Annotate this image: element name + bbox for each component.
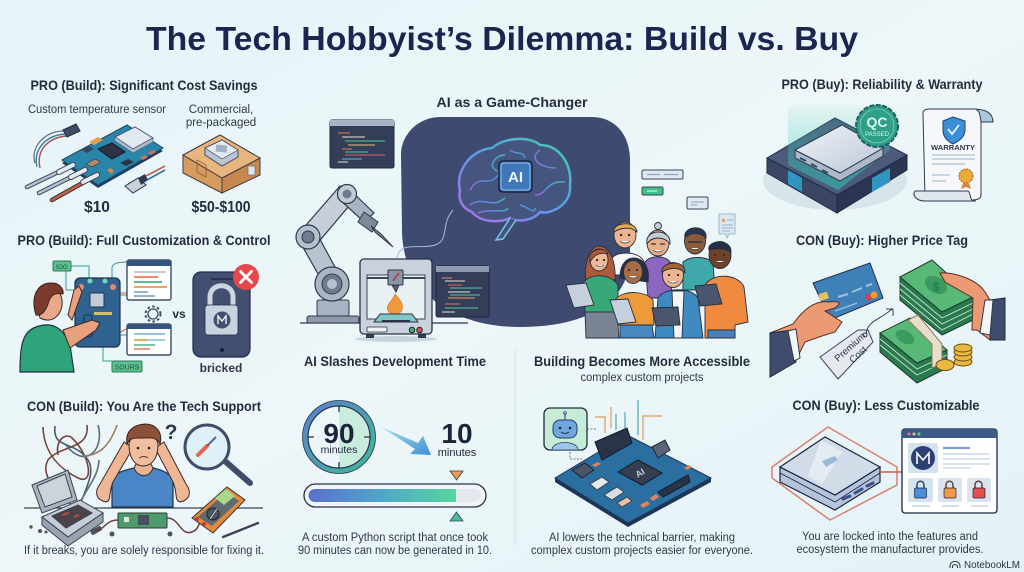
panel: CON build tech support	[24, 398, 264, 557]
icon: clock: 90	[323, 418, 355, 449]
icon: coins	[936, 344, 972, 370]
label: vs: vs	[172, 307, 186, 321]
outline: lock-in boundary	[772, 427, 897, 520]
tablet left	[566, 283, 594, 308]
window: code top	[127, 260, 171, 300]
value: 10 minutes: 10	[441, 418, 473, 449]
tablet far right	[695, 284, 722, 306]
price: $50-$100: $50-$100	[192, 199, 250, 216]
floating UI chips	[642, 170, 735, 238]
heading: CON (Buy): Higher Price Tag	[796, 232, 968, 248]
icon: locked device	[193, 264, 259, 357]
tag: IOG: IOG	[56, 264, 68, 271]
person: grey-haired woman	[645, 222, 672, 298]
icon: multimeter	[192, 487, 245, 533]
panel: CON buy less customizable	[772, 397, 997, 556]
icon: custom sensor board	[27, 124, 165, 200]
tag: premium cost: Premium	[833, 331, 868, 364]
person: front woman	[615, 258, 654, 338]
window: locked features	[902, 429, 997, 513]
icon: money stacks	[880, 260, 1005, 383]
icon: pen probe	[223, 523, 258, 537]
panel: AI as a game-changer	[296, 94, 748, 342]
heading: AI as a Game-Changer	[436, 94, 588, 110]
person: orange shirt man	[705, 242, 748, 338]
illustration: tangled wires	[43, 425, 117, 512]
icon: 3D printer	[355, 259, 437, 342]
person: front man	[655, 262, 703, 338]
label: bricked: bricked	[200, 361, 242, 375]
caption: ecosystem the manufacturer provides.	[796, 544, 984, 556]
panel: PRO build customization	[18, 232, 270, 375]
circuit traces	[595, 400, 662, 440]
caption: A custom Python script that once took	[302, 532, 488, 544]
panel: AI slashes development time	[298, 353, 492, 557]
icon: magnifier	[185, 425, 250, 483]
icon: green circuit board	[95, 513, 200, 533]
logo: NotebookLM: NotebookLM	[964, 560, 1020, 571]
debris	[29, 525, 172, 536]
icon: warranty scroll: WARRANTY	[931, 145, 975, 152]
tag: sours: SOURS	[115, 364, 140, 372]
heading: AI Slashes Development Time	[304, 353, 486, 369]
subheading: complex custom projects	[580, 372, 704, 384]
tag: premium cost	[820, 309, 893, 379]
connector	[880, 471, 902, 473]
icon: AI brain	[459, 139, 570, 240]
badge: QC passed: QC	[866, 114, 888, 130]
person: woman with red hair	[583, 246, 619, 338]
label: custom sensor: Custom temperature sensor	[28, 104, 166, 116]
person: confused	[97, 424, 189, 507]
divider	[514, 350, 516, 545]
icon: circuit board: AI	[634, 466, 646, 480]
price: $10: $10	[84, 199, 110, 216]
desk line	[24, 507, 263, 509]
panel: building becomes more accessible	[531, 353, 753, 557]
panel: PRO build cost savings	[27, 77, 260, 216]
title: The Tech Hobbyist’s Dilemma: Build vs. Buy	[146, 21, 858, 58]
tablets right	[652, 307, 680, 326]
icon: clock	[302, 400, 376, 474]
person: blonde man	[608, 222, 648, 275]
caption: 90 minutes can now be generated in 10.	[298, 545, 492, 557]
tag: sours	[112, 361, 142, 372]
caption: AI lowers the technical barrier, making	[549, 532, 735, 544]
window: code bottom	[127, 324, 171, 355]
floor line	[300, 322, 468, 324]
icon: open case	[32, 470, 103, 546]
panel: CON buy higher price	[770, 232, 1005, 383]
tablet mid	[610, 299, 636, 324]
caption: You are locked into the features and	[802, 531, 978, 543]
icon: clock: minutes	[321, 444, 357, 456]
label: commercial: Commercial,	[189, 104, 253, 116]
icon: gear	[146, 306, 160, 322]
question mark: ?	[165, 421, 177, 444]
people group	[566, 222, 748, 338]
heading: PRO (Build): Significant Cost Savings	[30, 77, 258, 93]
icon: hand with credit card	[770, 263, 883, 377]
heading: CON (Build): You Are the Tech Support	[27, 398, 261, 414]
badge: QC passed	[856, 105, 898, 147]
dark backdrop	[401, 117, 630, 327]
label: commercial: pre-packaged	[186, 117, 256, 129]
marker: green triangle	[450, 512, 463, 521]
icon: robot arm	[296, 184, 393, 323]
icon: mini PC	[780, 437, 880, 510]
lock: blue	[908, 478, 933, 502]
icon: robot tile	[544, 408, 587, 450]
icon: circuit board	[555, 428, 711, 527]
wire	[397, 210, 453, 258]
dashed links	[570, 429, 597, 459]
marker: orange triangle	[450, 471, 463, 480]
badge: QC passed: PASSED	[865, 132, 890, 138]
icon: AI brain: AI	[508, 169, 523, 186]
panel: PRO buy reliability	[763, 76, 993, 213]
icon: device on base	[763, 105, 907, 213]
lock: orange	[938, 478, 962, 502]
arrow	[381, 427, 431, 455]
window: code top-left	[330, 120, 394, 168]
progress bar	[304, 484, 486, 507]
heading: CON (Buy): Less Customizable	[792, 397, 980, 413]
window: code bottom	[436, 266, 489, 317]
icon: cardboard box	[183, 135, 260, 193]
value: 10 minutes: minutes	[438, 447, 477, 459]
person	[20, 325, 74, 372]
lock: red	[967, 478, 991, 502]
heading: PRO (Build): Full Customization & Control	[18, 232, 270, 248]
icon: person with board	[20, 261, 130, 372]
caption: complex custom projects easier for everyone.	[531, 545, 753, 557]
heading: Building Becomes More Accessible	[534, 353, 750, 369]
caption: If it breaks, you are solely responsible for fixing it.	[24, 545, 264, 557]
icon: money stacks: $	[933, 280, 940, 294]
heading: PRO (Buy): Reliability & Warranty	[782, 76, 983, 92]
icon: warranty scroll	[914, 109, 993, 201]
person: man with glasses	[683, 228, 715, 290]
tag: premium cost: Cost	[847, 344, 870, 366]
value: 10 minutes	[438, 418, 477, 459]
